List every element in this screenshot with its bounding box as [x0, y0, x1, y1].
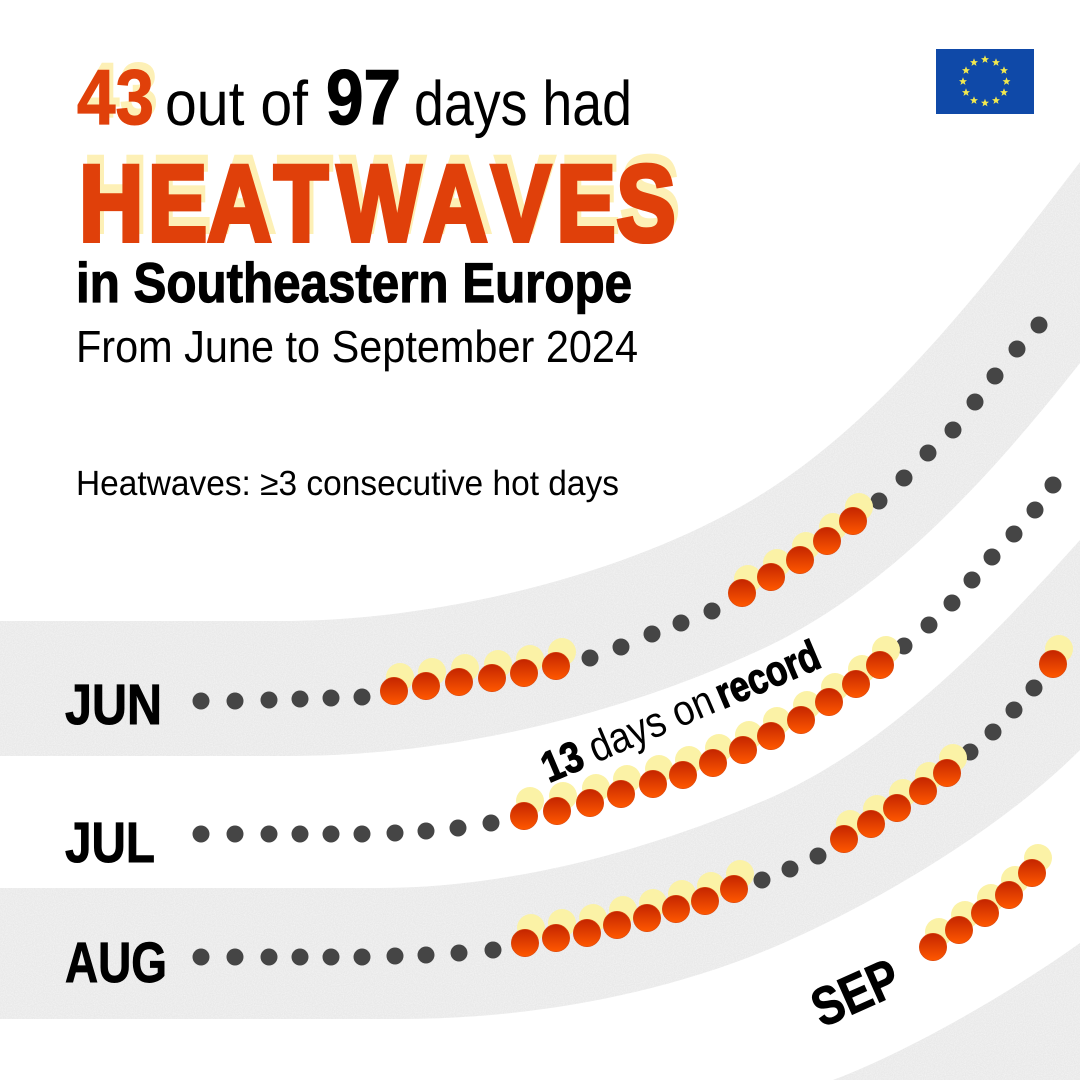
headline: HEATWAVES: HEATWAVES [83, 134, 680, 254]
subtitle: period: From June to September 2024 [76, 321, 638, 372]
band: corner background [833, 943, 1080, 1080]
headline line one: 43 [81, 46, 158, 134]
callout: 13 days on record: days on [581, 677, 721, 772]
headline line one: days had [414, 69, 632, 139]
title block [76, 46, 680, 372]
band: June and July background [0, 162, 1080, 756]
month row: July [65, 476, 1062, 875]
callout: 13 days on record [534, 632, 827, 792]
heatwave glow: September [925, 844, 1052, 946]
heatwave glow: July [516, 636, 900, 815]
headline: HEATWAVES: HEATWAVES [79, 142, 676, 264]
non-heatwave days: August [192, 680, 1042, 966]
headline line one: 43 [77, 53, 154, 141]
month row: August [65, 635, 1073, 995]
label: JUL: JUL [65, 811, 155, 875]
subtitle: region: in Southeastern Europe [76, 251, 632, 314]
non-heatwave days: June [192, 316, 1048, 710]
heatwave glow: August [517, 635, 1073, 942]
icon: EU flag [936, 49, 1034, 114]
definition note: Heatwaves: ≥3 consecutive hot days [76, 464, 619, 503]
month row: June [65, 316, 1048, 737]
heatwave days: June [380, 507, 867, 705]
callout: 13 days on record: 13 [534, 732, 591, 792]
headline line one: 97 [326, 53, 401, 141]
headline line one [77, 46, 632, 141]
label: AUG: AUG [65, 931, 167, 995]
heatwave days: July [510, 651, 894, 830]
non-heatwave days: July [192, 476, 1062, 842]
heatwave days: September [919, 859, 1046, 961]
month row: September [802, 844, 1052, 1039]
heatwave days: August [511, 650, 1067, 957]
label: JUN: JUN [65, 673, 162, 737]
callout: 13 days on record: record [708, 632, 827, 718]
headline line one: out of [165, 69, 308, 139]
label: SEP: SEP [802, 948, 909, 1039]
band: August background [0, 540, 1080, 1019]
heatwave glow: June [386, 493, 873, 691]
